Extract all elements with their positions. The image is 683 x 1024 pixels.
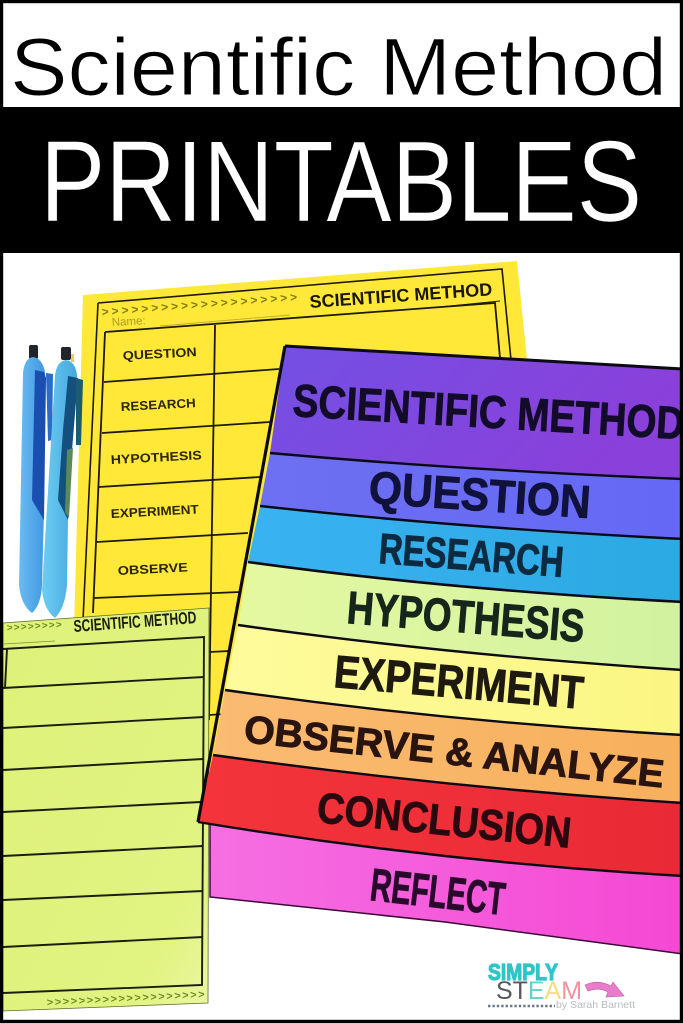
white title background [3,3,680,107]
green sheet top chevrons: >>>>>>>> [7,620,62,634]
flap: scientific method header [270,346,683,479]
logo: Simply STEAM by Sarah Barnett [488,959,635,1011]
flap: experiment [225,625,683,735]
green sheet bottom chevrons: >>>>>>>>>>>>>>>>>>>> [47,989,205,1009]
title band: Printables [0,107,683,253]
logo word: simply: SIMPLY [488,959,558,985]
logo word: steam: STEAM [496,977,582,1005]
green sheet name line [4,641,55,644]
yellow sheet row labels [110,345,202,578]
green sheet table lines [3,637,204,993]
yellow sheet chevrons: >>>>>>>>>>>>>>>>>>>> [101,290,298,319]
flip book outlines [198,346,683,876]
icon: pink arrow [585,982,624,997]
flap: hypothesis [238,562,683,670]
yellow sheet name field: Name: [112,315,146,329]
flap labels: REFLECT [368,858,508,925]
yellow sheet row labels: QUESTION [122,345,197,363]
title band: Scientific Method [3,3,680,113]
yellow sheet row labels: HYPOTHESIS [110,448,202,467]
panel: green worksheet [3,608,209,1011]
yellow sheet row labels: RESEARCH [120,396,196,414]
yellow sheet row labels: EXPERIMENT [110,502,199,521]
flap: observe and analyze [213,690,683,803]
flap labels: HYPOTHESIS [345,581,587,652]
flap: reflect [210,822,683,954]
black title background [0,107,683,253]
flap labels: OBSERVE & ANALYZE [242,708,666,797]
yellow sheet paper [74,261,530,810]
icon: blue pens [19,345,83,618]
panel: colored flip book [198,346,683,954]
flap labels: RESEARCH [377,525,565,587]
yellow sheet title: SCIENTIFIC METHOD [309,279,493,312]
flap: research [248,506,683,602]
logo byline: by Sarah Barnett [556,999,635,1011]
flap: conclusion [198,755,683,876]
panel: yellow worksheet [74,261,530,810]
title text: Scientific Method [10,22,667,113]
yellow sheet name field [112,315,290,329]
flap labels: EXPERIMENT [332,645,586,719]
flap: question [260,453,683,539]
green sheet title: SCIENTIFIC METHOD [73,608,197,636]
flap labels [242,374,683,925]
yellow sheet row labels: OBSERVE [117,560,188,578]
flap labels: QUESTION [367,461,592,528]
yellow sheet table lines [83,269,511,720]
right pen [42,347,83,618]
flap labels: CONCLUSION [315,784,574,858]
logo dotted line [488,1005,555,1007]
green sheet paper [3,608,209,1011]
left pen [19,345,53,613]
